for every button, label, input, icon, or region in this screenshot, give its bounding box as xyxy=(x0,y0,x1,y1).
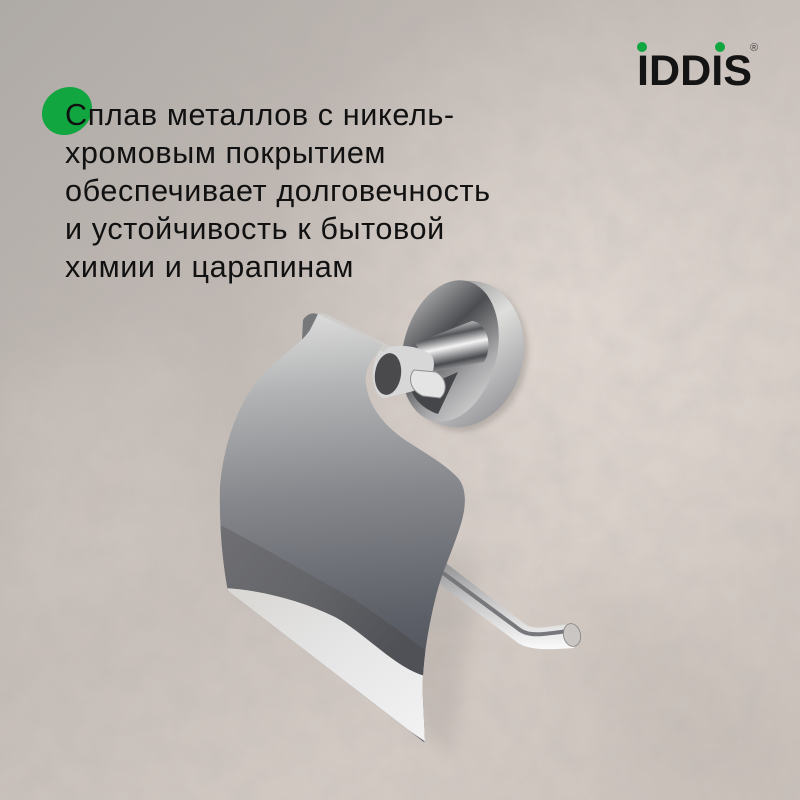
collar opening xyxy=(372,351,404,397)
reflection band xyxy=(218,524,425,678)
mount face xyxy=(387,270,513,432)
cover top edge xyxy=(318,313,390,352)
mount face dark wedge xyxy=(412,372,458,414)
wall mount xyxy=(372,268,543,444)
logo: IDDIS: ® xyxy=(750,42,758,54)
main text block: обеспечивает долговечность xyxy=(65,174,491,208)
main text block: Сплав металлов с никель- xyxy=(65,98,455,132)
pin xyxy=(411,370,445,398)
hinge behind cover xyxy=(302,313,320,340)
main text block: химии и царапинам xyxy=(65,250,354,284)
collar xyxy=(373,346,434,398)
post xyxy=(415,321,488,372)
main text block: и устойчивость к бытовой xyxy=(65,212,445,246)
chrome cover xyxy=(220,314,465,742)
holder shadow on wall xyxy=(300,560,480,760)
mount rim xyxy=(387,268,539,440)
logo: IDDIS: IDDIS xyxy=(637,47,752,95)
paper roll arm xyxy=(438,557,583,649)
main text block: хромовым покрытием xyxy=(65,136,386,170)
mount shadow xyxy=(391,272,543,444)
green accent blob xyxy=(33,77,101,145)
bright lower panel xyxy=(220,588,430,745)
